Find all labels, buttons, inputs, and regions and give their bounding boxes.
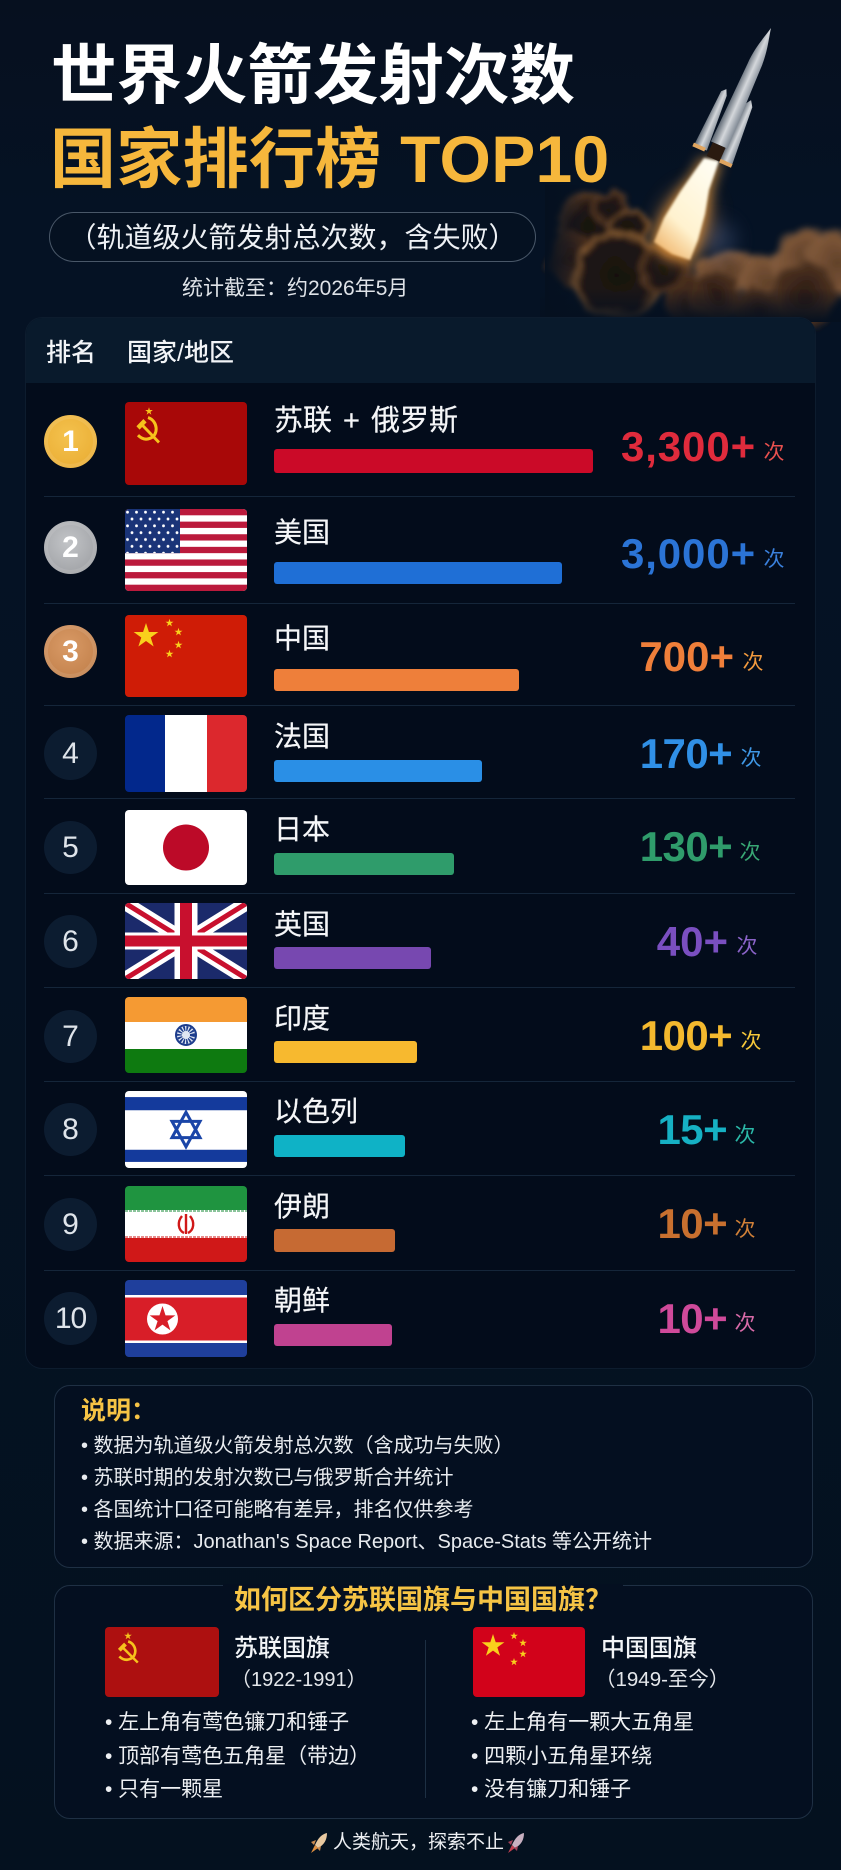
USSR bullets: • 只有一颗星 [105,1778,223,1801]
China bullets: • 没有镰刀和锤子 [471,1778,631,1801]
icon: rocket right [508,1833,524,1853]
China flag title: 中国国旗 [601,1635,697,1662]
icon: rocket left [311,1833,327,1853]
flag: China [125,615,247,697]
unit: 次 [740,841,760,864]
rank 5: 5 [62,831,79,864]
bar [274,853,454,875]
flame [650,158,722,262]
row 4: France [44,715,795,799]
name: 以色列 [274,1096,358,1127]
smoke glow [699,222,735,258]
USSR bullets [105,1711,370,1801]
comparison panel [54,1585,813,1819]
flag: UK [125,903,247,979]
value: 10+ [658,1200,727,1247]
USSR flag years: （1922-1991） [231,1669,367,1691]
value: 3,000+ [621,530,756,577]
unit: 次 [734,1312,756,1335]
value: 100+ [640,1012,732,1059]
USSR flag title: 苏联国旗 [234,1635,330,1662]
row 5: Japan [44,810,795,894]
clouds [544,190,841,342]
medal 2 [44,521,97,574]
bar [274,1324,392,1346]
title line 2: 国家排行榜 TOP10 [50,122,610,196]
bar [274,947,431,969]
China bullets [471,1711,694,1801]
rank 4 [44,727,97,780]
value: 10+ [658,1295,727,1342]
value: 15+ [658,1106,727,1153]
title line 1: 世界火箭发射次数 [51,39,575,112]
row 10: North Korea [44,1280,756,1357]
value: 170+ [640,730,732,777]
title [50,39,610,196]
bar [274,669,519,691]
medal 3 [44,625,97,678]
rank 10 [44,1292,97,1345]
name: 中国 [274,623,330,654]
rank 5 [44,821,97,874]
comparison heading: 如何区分苏联国旗与中国国旗？ [234,1585,612,1615]
unit: 次 [740,747,762,770]
rank 8 [44,1103,97,1156]
China bullets: • 四颗小五角星环绕 [471,1745,652,1768]
flag: USSR [125,402,247,485]
name: 美国 [274,517,330,548]
footer [311,1832,524,1853]
flag: Japan [125,810,247,885]
note 4: • 数据来源：Jonathan's Space Report、Space-Stats 等公开统计 [81,1531,652,1553]
name: 朝鲜 [274,1285,330,1316]
rank 9: 9 [62,1208,79,1241]
rank 9 [44,1198,97,1251]
row 8: Israel [44,1091,795,1176]
medal 1: 1 [62,425,79,458]
row 7: India [44,997,795,1082]
footer text: 人类航天，探索不止 [333,1832,504,1853]
bar [274,1135,405,1157]
value: 130+ [640,823,732,870]
USSR bullets: • 左上角有莺色镰刀和锤子 [105,1711,349,1734]
flag: Iran [125,1186,247,1262]
subtitle pill: （轨道级火箭发射总次数，含失败） [68,222,516,253]
rank 6 [44,915,97,968]
note 1: • 数据为轨道级火箭发射总次数（含成功与失败） [81,1435,514,1457]
unit: 次 [734,1124,756,1147]
row 2: USA [44,509,795,604]
value: 700+ [639,633,734,680]
name: 日本 [274,814,330,845]
name: 苏联 + 俄罗斯 [274,405,458,437]
name: 伊朗 [274,1191,330,1222]
stats date: 统计截至：约2026年5月 [182,277,408,300]
ranking panel [26,318,815,1368]
value: 40+ [657,918,728,965]
bar [274,1041,417,1063]
rank 7 [44,1010,97,1063]
medal 1 [44,415,97,468]
unit: 次 [764,441,784,464]
note 3: • 各国统计口径可能略有差异，排名仅供参考 [81,1499,474,1521]
row 6: UK [44,903,795,988]
name: 英国 [274,909,330,940]
flag: USA [125,509,247,591]
note 2: • 苏联时期的发射次数已与俄罗斯合并统计 [81,1467,454,1489]
China flag years: （1949-至今） [595,1668,729,1691]
header: rank: 排名 [46,339,96,367]
rank 6: 6 [62,925,79,958]
unit: 次 [734,1218,756,1241]
bar [274,1229,395,1252]
medal 3: 3 [62,635,79,668]
header: country: 国家/地区 [127,339,234,367]
flag: France [125,715,247,792]
subtitle pill [49,212,536,262]
notes heading: 说明： [81,1397,156,1425]
notes panel [54,1385,813,1568]
unit: 次 [742,651,764,674]
bar [274,562,562,584]
bar [274,760,482,782]
rank 8: 8 [62,1113,79,1146]
flag: Israel [125,1091,247,1168]
name: 法国 [274,721,330,752]
name: 印度 [274,1003,330,1034]
illustration: rocket launch with flame and clouds [542,28,841,330]
bar [274,449,593,473]
China bullets: • 左上角有一颗大五角星 [471,1711,694,1734]
China flag small [473,1627,585,1697]
row 3: China [44,615,795,706]
flag: USSR small [105,1627,219,1697]
rank 4: 4 [62,737,79,770]
row 9: Iran [44,1186,795,1271]
rank 7: 7 [62,1020,79,1053]
unit: 次 [740,1030,762,1053]
unit: 次 [736,935,758,958]
row 1: USSR + Russia [44,402,795,497]
value: 3,300+ [621,423,756,470]
flag: North Korea [125,1280,247,1357]
USSR bullets: • 顶部有莺色五角星（带边） [105,1745,370,1768]
rank 10: 10 [55,1302,86,1335]
unit: 次 [764,548,784,571]
rocket body [691,18,789,168]
medal 2: 2 [62,531,79,564]
flag: India [125,997,247,1073]
table header [26,318,815,383]
